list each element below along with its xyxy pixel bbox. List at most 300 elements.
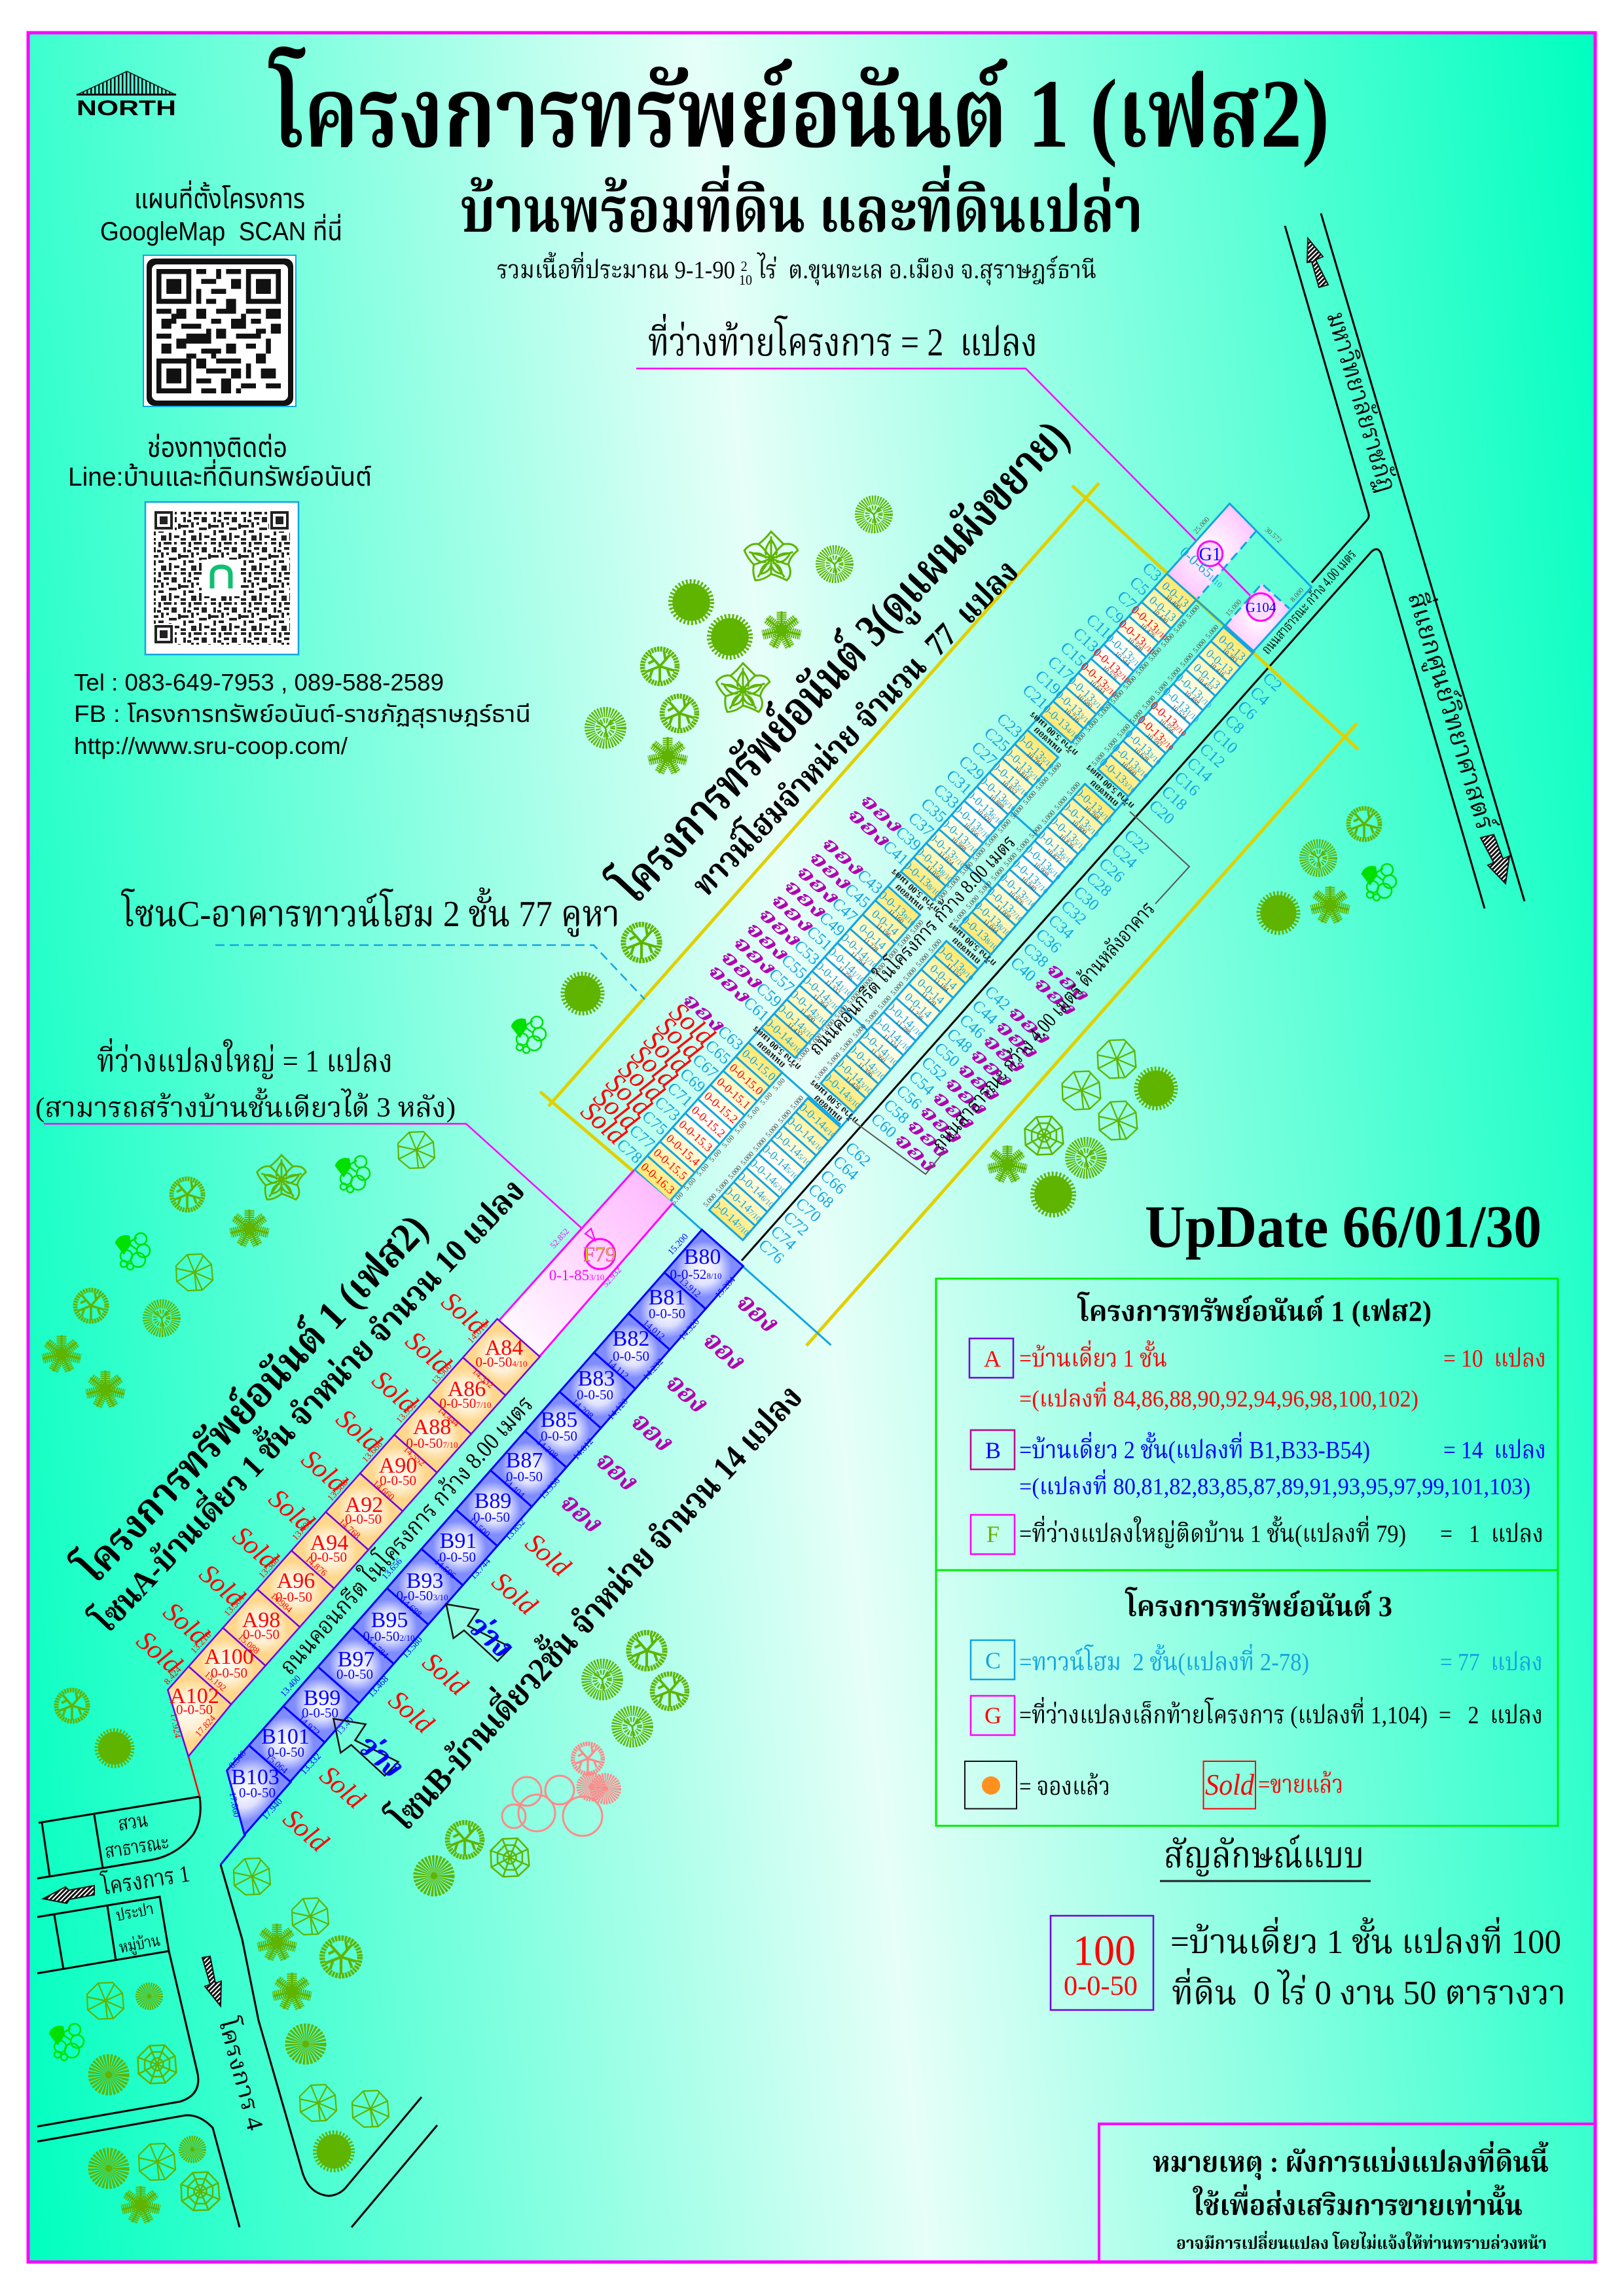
plot depth dimensions: 10.988 [949, 836, 967, 853]
plot areas right row: 0-0-146/10 [748, 1157, 790, 1196]
plot areas left row: 0-0-142/10 [788, 988, 831, 1028]
plot areas left row: 0-0-137/10 [952, 802, 994, 842]
road labels: สี่แยกศูนย์วิทยาศาสตร์ [1400, 588, 1505, 834]
plot numbers left row: C5 [1127, 573, 1152, 600]
plot areas left row: 0-0-15.0 [727, 1061, 766, 1098]
plot areas left row: 0-0-15.2 [689, 1103, 728, 1140]
plot labels row B: 0-0-50 [336, 1666, 373, 1682]
plot numbers right row: C74 [767, 1223, 800, 1254]
plot numbers left row: C53 [791, 937, 823, 969]
legend sold [1203, 1761, 1343, 1809]
frontage dimensions: 5.000 5.000 5.000 5.000 5.000 5.000 5.000 5.000 [702, 1094, 806, 1209]
reserved labels right: จอง [889, 1127, 941, 1177]
plot numbers left row: C43 [854, 867, 886, 897]
symbol explanation [1170, 1917, 1566, 2012]
plot depth dimensions: 10.680 [1075, 692, 1094, 710]
reserved labels left: จอง [842, 802, 895, 852]
plot labels row A: A96 [277, 1569, 315, 1593]
plot areas right row: 0-0-138/10 [972, 899, 1015, 939]
plot numbers left row: C9 [1101, 601, 1127, 628]
plot labels row A: A92 [345, 1493, 383, 1517]
plot areas right row: 0-0-13 [1216, 632, 1248, 663]
plot areas left row: 0-0-15.3 [676, 1117, 715, 1154]
plot numbers left row: C49 [816, 908, 848, 940]
contact details [74, 669, 531, 759]
panel: disclaimer note: หมายเหตุ : ผังการแบ่งแปลงที่ดินนี้ [1153, 2141, 1549, 2180]
road labels: โครงการ 4 [213, 2014, 272, 2133]
plot areas left row: 0-0-15.2 [702, 1089, 740, 1126]
legend row F: = 1 แปลง [1440, 1520, 1543, 1548]
dimensions row B: 14.596 [432, 1557, 458, 1581]
plot numbers right row: C46 [956, 1011, 988, 1043]
plot areas right row: 0-0-134/10 [1073, 785, 1115, 825]
plot areas left row: 0-0-132/10 [1104, 631, 1146, 671]
plot areas left row: 0-0-139/10 [876, 888, 919, 928]
plan: zone C townhouse strip [575, 521, 1363, 1346]
plot areas right row: 0-0-141/10 [872, 1014, 914, 1054]
plot depth dimensions: 10.768 [1083, 804, 1101, 822]
dimensions row B: 13.468 [367, 1674, 391, 1700]
plot F79: 52.932 [600, 1265, 623, 1289]
frontage dimensions: 5.000 5.000 5.000 5.000 5.000 5.000 5.000 5.000 5.000 5.000 [1091, 623, 1221, 768]
zone C labels: ทาวน์โฮมจำหน่าย จำนวน 77 แปลง [682, 550, 1025, 903]
plot numbers left row: C35 [918, 795, 950, 827]
plot numbers left row: C51 [803, 923, 835, 954]
legend row G: G [984, 1702, 1001, 1729]
legend row C: =ทาวน์โฮม 2 ชั้น(แปลงที่ 2-78) [1019, 1643, 1309, 1676]
plot depth dimensions: 10.784 [1025, 751, 1043, 768]
plot depth dimensions: 10.852 [1000, 779, 1019, 797]
plot depth dimensions: 10.452 [1195, 675, 1214, 692]
plot numbers left row: C27 [968, 738, 1000, 770]
dimensions row A: 13.216 [189, 1630, 213, 1656]
reserved labels right: จอง [952, 1056, 1005, 1106]
plot areas left row: 0-0-15.5 [651, 1146, 690, 1183]
plot numbers right row: C26 [1096, 855, 1128, 886]
plot numbers left row: C73 [651, 1093, 683, 1124]
reserved labels left: จอง [804, 845, 856, 895]
plot blocks right row [706, 627, 1261, 1240]
plot numbers left row: C65 [702, 1037, 734, 1068]
plot numbers right row: C38 [1020, 940, 1052, 971]
project area note: 2 [741, 258, 748, 274]
plot labels row B: 0-0-528/10 [670, 1266, 722, 1282]
plots G1 and G104: G1 [1199, 545, 1221, 565]
project area note: ไร่ ต.ขุนทะเล อ.เมือง จ.สุราษฎร์ธานี [752, 253, 1096, 286]
plot numbers left row: C7 [1113, 588, 1140, 613]
plot labels row B [231, 1245, 722, 1801]
plot blocks left row [635, 573, 1202, 1201]
legend row F: =ที่ว่างแปลงใหญ่ติดบ้าน 1 ชั้น(แปลงที่ 79) [1019, 1515, 1406, 1548]
plot areas left row: 0-0-132/10 [1078, 660, 1121, 700]
plot areas left row: 0-0-15.1 [714, 1075, 753, 1111]
plot labels row A: 0-0-50 [211, 1665, 247, 1681]
reserved labels left: จอง [703, 958, 755, 1008]
sold labels left: Sold [575, 1096, 632, 1151]
plot labels row B: 0-0-50 [649, 1306, 685, 1321]
reserved labels left [677, 788, 907, 1037]
plot numbers right row: C58 [880, 1096, 912, 1127]
dimensions row A: 14.332 [470, 1367, 496, 1391]
dimensions row B: 17.860 [227, 1791, 241, 1818]
plot depth dimensions: 10.660 [1119, 761, 1138, 778]
reserved labels left: จอง [766, 888, 818, 937]
plot labels row B: B82 [613, 1327, 649, 1351]
plot numbers right row: C62 [842, 1139, 874, 1170]
plot numbers right row [754, 670, 1293, 1268]
plot depth dimensions: 10.508 [1126, 636, 1144, 653]
plot numbers left row: C19 [1032, 667, 1064, 698]
zone C labels: ถนนคอนกรีต ในโครงการ กว้าง 8.00 เมตร [803, 829, 1020, 1060]
dimensions row A: 13.304 [223, 1593, 247, 1619]
plot numbers left row: C23 [993, 710, 1026, 742]
title: โครงการทรัพย์อนันต์ 1 (เฟส2) [268, 46, 1329, 168]
dimensions row B: 14.972 [296, 1714, 321, 1738]
legend row A: A [984, 1346, 1001, 1372]
plot labels row B: B93 [406, 1569, 443, 1593]
plot areas right row: 0-0-137/10 [1010, 856, 1053, 896]
plot depth dimensions: 11.220 [919, 990, 937, 1008]
map heading: GoogleMap SCAN ที่นี่ [100, 213, 342, 246]
plot numbers left row: C41 [880, 838, 912, 869]
dimensions row B: 13.912 [677, 1276, 702, 1300]
sold labels row A and B: Sold [382, 1685, 440, 1740]
plot areas left row: 0-0-138/10 [901, 859, 944, 899]
dimensions row B: 15.284 [713, 1275, 738, 1300]
plot numbers right row: C32 [1058, 897, 1090, 929]
plot depth dimensions: 11.184 [932, 977, 950, 994]
legend sold: =ขายแล้ว [1258, 1771, 1343, 1799]
symbol example box: 0-0-50 [1064, 1971, 1138, 2001]
plot numbers right row: C44 [969, 997, 1001, 1028]
plot areas right row: 0-0-133/10 [1097, 755, 1140, 795]
dimensions row B: 13.580 [401, 1635, 425, 1660]
plot depth dimensions: 11.056 [924, 864, 943, 882]
plots G1 and G104: 15.000 [1224, 598, 1244, 618]
dimensions row B: 15.200 [666, 1232, 691, 1257]
legend heading phase 3: โครงการทรัพย์อนันต์ 3 [1125, 1587, 1392, 1623]
plot depth dimensions: 11.396 [856, 1062, 875, 1079]
plot depth dimensions: 11.008 [994, 904, 1012, 921]
plot areas left row: 0-0-131/10 [1116, 617, 1159, 657]
dimensions row B: 14.308 [534, 1437, 560, 1462]
panel: legend [936, 1279, 1558, 1826]
plot depth dimensions: 10.888 [987, 793, 1005, 810]
reserved labels right: จอง [990, 1014, 1042, 1064]
road labels: สวน [117, 1809, 150, 1835]
update date: UpDate 66/01/30 [1145, 1193, 1542, 1260]
legend row A: =บ้านเดี่ยว 1 ชั้น [1019, 1340, 1167, 1372]
plot depth dimensions: 11.264 [849, 950, 867, 967]
arrow: vacant plot B99: ว่าง [350, 1727, 410, 1784]
symbol explanation: =บ้านเดี่ยว 1 ชั้น แปลงที่ 100 [1170, 1917, 1561, 1961]
plot numbers right row: C24 [1108, 840, 1140, 872]
plot areas right row [706, 628, 1258, 1238]
plot areas right row: 0-0-14 [928, 961, 960, 992]
plot labels row A: A94 [310, 1531, 348, 1555]
plot areas right row: 0-0-14 [915, 976, 947, 1007]
plot depth dimensions: 11.324 [882, 1033, 899, 1050]
plot areas right row: 0-0-133/10 [1110, 741, 1153, 781]
leader dashed zone C [215, 945, 645, 999]
plot labels row A: 0-0-50 [243, 1626, 280, 1642]
zone C labels [600, 406, 1159, 1155]
plot areas left row: 0-0-13 [1147, 594, 1179, 624]
road labels: โครงการ 1 [99, 1857, 192, 1900]
reserved labels row B: จอง [696, 1323, 751, 1376]
plot numbers left row: C69 [676, 1065, 708, 1096]
soi road labels: ถนนซอย [755, 1039, 787, 1069]
plot areas right row: 0-0-132/10 [1147, 698, 1190, 739]
callout: remaining end plots: ที่ว่างท้ายโครงการ = 2 แปลง [648, 314, 1038, 364]
plots G1 and G104: 25.000 [1192, 515, 1212, 535]
plot numbers right row: C50 [931, 1039, 963, 1071]
plot numbers left row: C59 [753, 980, 785, 1011]
reserved labels row B [554, 1285, 785, 1539]
legend row G: =ที่ว่างแปลงเล็กท้ายโครงการ (แปลงที่ 1,104) [1019, 1696, 1428, 1729]
plot areas right row: 0-0-135/10 [1060, 800, 1103, 840]
dimensions row A: 14.876 [303, 1554, 329, 1579]
reserved labels left: จอง [791, 859, 844, 909]
callout: large plot [35, 1038, 456, 1123]
legend heading phase 1: โครงการทรัพย์อนันต์ 1 (เฟส2) [1077, 1291, 1432, 1327]
plot numbers left row: C33 [930, 781, 962, 812]
callout: large plot: ที่ว่างแปลงใหญ่ = 1 แปลง [97, 1038, 393, 1079]
plot labels row B: B87 [506, 1448, 543, 1473]
plot depth dimensions: 10.956 [962, 821, 981, 839]
plot numbers right row: C54 [905, 1067, 938, 1099]
plot numbers right row: C12 [1196, 740, 1228, 772]
plot depth dimensions: 10.576 [1100, 664, 1119, 682]
leader: back road [854, 812, 1189, 1174]
plot areas right row: 0-0-133/10 [1123, 727, 1165, 767]
dimensions row A: 17.824 [194, 1713, 218, 1739]
plot areas right row: 0-0-14 [902, 990, 934, 1021]
frontage dimensions: 5.000 5.000 5.000 5.000 5.000 5.000 5.000 5.000 5.000 5.000 [1071, 603, 1202, 748]
sold labels left [575, 997, 720, 1151]
plots G1 and G104: 30.572 [1263, 526, 1283, 545]
plots row A [144, 1319, 542, 1757]
road labels [99, 308, 1505, 2133]
plot areas right row: 0-0-143/10 [834, 1056, 876, 1096]
plot labels row A: 0-0-507/10 [406, 1435, 458, 1451]
plot areas right row: 0-0-131/10 [1161, 685, 1203, 725]
plot areas right row: 0-0-138/10 [959, 913, 1001, 953]
plot numbers right row: C28 [1083, 869, 1115, 900]
sold labels row A and B: Sold [226, 1520, 284, 1576]
leader line to G1 and G104 [636, 368, 1250, 596]
sold labels row A and B: Sold [157, 1596, 215, 1652]
plot numbers right row: C20 [1146, 797, 1178, 828]
trees landscaping [43, 500, 1396, 2222]
plot areas right row: 0-0-142/10 [846, 1042, 889, 1082]
plot areas left row [634, 575, 1199, 1198]
sold labels left: Sold [625, 1039, 683, 1094]
road labels: ถนนสาธารณะ กว้าง 4.00 เมตร [1258, 546, 1360, 657]
sold labels row A and B: Sold [130, 1625, 188, 1681]
dimensions row A: 14.552 [401, 1444, 427, 1469]
plot numbers left row: C15 [1057, 639, 1089, 670]
plot areas left row: 0-0-136/10 [977, 774, 1020, 814]
sold labels left: Sold [651, 1011, 708, 1066]
frontage dimensions: 5.00 5.00 5.00 5.00 5.00 5.00 5.00 5.00 5.00 [670, 1077, 787, 1206]
plot areas left row: 0-0-13 [1159, 579, 1191, 610]
dimensions row B: 14.112 [605, 1357, 630, 1381]
frontage dimensions: 5.000 5.000 5.000 5.000 5.000 5.000 5.000 5.000 5.000 5.000 [933, 761, 1064, 906]
plot areas left row: 0-0-14 [869, 907, 901, 938]
legend row B [971, 1430, 1546, 1499]
legend row C [971, 1640, 1543, 1679]
pink tree cluster [502, 1744, 613, 1836]
plot numbers left row: C78 [613, 1136, 645, 1167]
plot numbers right row: C34 [1045, 911, 1077, 943]
map heading [100, 180, 342, 246]
dimensions row B: 14.500 [466, 1516, 492, 1540]
plot labels row A: A102 [170, 1684, 219, 1708]
plot depth dimensions: 10.872 [1045, 847, 1063, 865]
dimensions row A: 15.088 [236, 1632, 261, 1657]
plot labels row B: B85 [541, 1408, 577, 1432]
contact details: Tel : 083-649-7953 , 089-588-2589 [74, 669, 444, 696]
plot numbers left row: C47 [829, 895, 861, 926]
soi road labels: กว้าง 5.00 เมตร [1083, 762, 1136, 811]
sold labels left: Sold [663, 997, 720, 1052]
dimensions row A: 15.192 [202, 1670, 228, 1694]
plot areas right row: 0-0-145/10 [760, 1142, 803, 1182]
symbol example box [1051, 1916, 1153, 2010]
plot depth dimensions: 10.400 [1164, 594, 1182, 611]
plot depth dimensions: 10.440 [1151, 608, 1169, 625]
plot depth dimensions: 11.428 [844, 1075, 861, 1092]
icon: QR code GoogleMap [143, 255, 296, 406]
reserved labels right: จอง [927, 1085, 979, 1134]
reserved labels left: จอง [741, 916, 793, 965]
plot numbers right row: C8 [1221, 711, 1248, 738]
plot labels row A: 0-0-50 [176, 1702, 213, 1717]
dimensions row A: 13.496 [291, 1517, 315, 1543]
plot labels row B: 0-0-50 [268, 1744, 304, 1760]
plot depth dimensions: 10.816 [1013, 765, 1031, 782]
legend row G: = 2 แปลง [1439, 1702, 1543, 1729]
symbol explanation: ที่ดิน 0 ไร่ 0 งาน 50 ตารางวา [1172, 1968, 1566, 2012]
plot labels row B: 0-0-50 [506, 1469, 543, 1484]
plot areas right row: 0-0-144/10 [785, 1114, 827, 1154]
plot areas right row: 0-0-139/10 [935, 943, 977, 983]
sold labels row A and B: Sold [416, 1647, 474, 1702]
soi road labels: กว้าง 5.00 เมตร [946, 920, 999, 969]
plot depth dimensions: 11.152 [945, 962, 963, 979]
plot depth dimensions: 11.332 [823, 978, 842, 996]
plot labels row B: 0-0-50 [239, 1785, 276, 1801]
plot numbers right row: C48 [943, 1025, 975, 1056]
legend reserved [965, 1761, 1110, 1809]
legend row B: = 14 แปลง [1443, 1437, 1546, 1464]
dimensions row B: 8.540 [227, 1749, 249, 1770]
dimensions row B [227, 1232, 738, 1822]
sold labels row A and B: Sold [519, 1528, 577, 1583]
plot areas left row: 0-0-144/10 [763, 1016, 806, 1056]
plot areas left row: 0-0-135/10 [990, 759, 1032, 800]
plot labels row B: B97 [338, 1647, 374, 1672]
plot depth dimensions: 10.524 [1170, 704, 1188, 721]
dimensions row B: 14.208 [569, 1397, 595, 1422]
plot numbers left row: C3 [1139, 559, 1165, 585]
plot labels row B: B81 [649, 1285, 685, 1310]
dimensions row B: 14.320 [677, 1317, 702, 1342]
plot numbers left row: C55 [778, 951, 810, 982]
soi road labels: ถนนซอย [1032, 725, 1064, 755]
plot labels row B: 0-0-50 [541, 1428, 577, 1444]
plot labels row B: 0-0-50 [613, 1348, 649, 1364]
plot numbers right row: C6 [1234, 698, 1260, 723]
plot labels row B: B83 [578, 1367, 615, 1391]
plot areas right row: 0-0-135/10 [1048, 814, 1091, 853]
contact heading: ช่องทางติดต่อ [147, 432, 287, 463]
plot labels row A [170, 1336, 528, 1717]
plot depth dimensions: 10.544 [1113, 651, 1131, 668]
dimensions row A: 14.660 [370, 1479, 396, 1503]
plot numbers left row: C67 [689, 1051, 721, 1082]
plot labels row B: B89 [475, 1489, 511, 1513]
sold labels row A and B: Sold [486, 1566, 543, 1622]
plot areas left row: 0-0-133/10 [1066, 673, 1108, 713]
plot depth dimensions: 10.556 [1157, 718, 1176, 735]
dimensions row A: 14.444 [435, 1405, 461, 1429]
plot depth dimensions: 11.160 [887, 908, 905, 925]
plot labels row B: 0-0-50 [302, 1705, 338, 1721]
plot depth dimensions: 11.400 [799, 1007, 816, 1024]
reserved labels row B: จอง [589, 1444, 644, 1497]
road labels: มหาวิทยาลัยราชภัฏ [1320, 308, 1402, 495]
plot areas right row: 0-0-147/10 [710, 1198, 753, 1238]
legend sold: Sold [1205, 1768, 1255, 1801]
legend row B: =(แปลงที่ 80,81,82,83,85,87,89,91,93,95,97,99,101,103) [1019, 1469, 1530, 1499]
plot labels row B: 0-0-50 [439, 1549, 476, 1565]
plot labels row A: A100 [204, 1645, 254, 1669]
plot numbers right row: C18 [1158, 783, 1190, 814]
plot areas left row: 0-0-137/10 [927, 831, 969, 870]
plot numbers right row: C22 [1121, 827, 1153, 858]
reserved labels left: จอง [855, 788, 907, 838]
dimensions row B: 15.064 [264, 1752, 289, 1776]
plot areas left row: 0-0-14 [857, 922, 889, 952]
plot F79: 52.852 [548, 1227, 571, 1250]
symbol heading: สัญลักษณ์แบบ [1164, 1835, 1364, 1876]
reserved labels row B: จอง [554, 1486, 609, 1539]
legend row B: B [985, 1437, 1001, 1463]
plot depth dimensions: 10.800 [1070, 819, 1088, 836]
panel: disclaimer note [1099, 2124, 1595, 2262]
dimensions row A: 17.924 [168, 1712, 182, 1739]
plot areas right row: 0-0-147/10 [723, 1184, 765, 1224]
plot numbers right row: C72 [780, 1208, 812, 1240]
dimensions row B: 14.012 [641, 1318, 666, 1342]
plot depth dimensions: 11.288 [894, 1019, 912, 1036]
zone A labels: ถนนคอนกรีต ในโครงการ กว้าง 8.00 เมตร [272, 1389, 538, 1679]
plot depth dimensions: 10.836 [1057, 833, 1075, 850]
sold labels row A and B: Sold [366, 1365, 424, 1420]
plot numbers right row: C16 [1171, 768, 1203, 800]
project area note: รวมเนื้อที่ประมาณ 9-1-90 [497, 257, 758, 284]
sold labels row A and B: Sold [330, 1403, 388, 1459]
zone A labels: โซนA-บ้านเดี่ยว 1 ชั้น จำหน่าย จำนวน 10 แปลง [82, 1168, 532, 1640]
plot areas left row: 0-0-15.4 [664, 1132, 702, 1168]
arrow: vacant plot B99 [333, 1719, 410, 1784]
reserved labels right: จอง [1003, 999, 1055, 1049]
dimensions row B: 13.332 [299, 1751, 323, 1777]
sold labels row A and B: Sold [399, 1325, 457, 1381]
plot areas right row: 0-0-141/10 [884, 999, 927, 1039]
